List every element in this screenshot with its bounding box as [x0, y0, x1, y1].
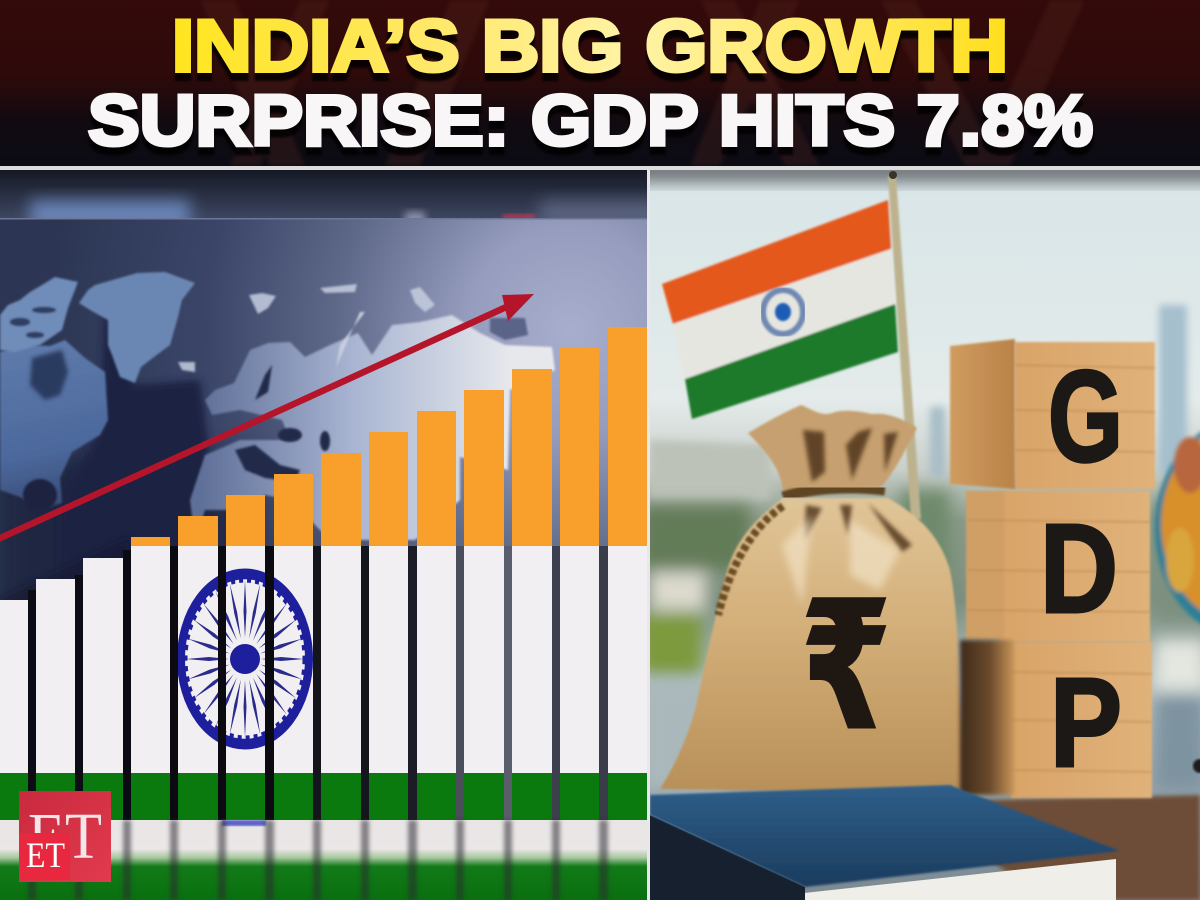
block G: G [1048, 343, 1123, 489]
bag rope [783, 488, 885, 497]
flag stripes [662, 200, 898, 419]
title line 2: SURPRISE: GDP HITS 7.8% [88, 90, 1093, 169]
flag pole [888, 176, 921, 519]
flag [662, 171, 921, 519]
panel divider [647, 170, 650, 900]
wooden GDP blocks [950, 339, 1155, 798]
continent: greenland [79, 272, 195, 383]
book [650, 785, 1120, 900]
bars: white section [0, 546, 647, 773]
money bag [660, 405, 980, 794]
ashoka chakra [181, 574, 309, 744]
panel: flag, rupee bag and GDP blocks [600, 160, 1200, 900]
title line 1: INDIA’S BIG GROWTH [172, 6, 1008, 87]
dark seas [235, 312, 528, 482]
bag highlights [782, 515, 900, 605]
panel: rising bar chart over world map [0, 170, 660, 900]
rupee symbol: ₹ [801, 564, 891, 769]
dark gaps between bars [0, 537, 608, 820]
bars: green section [0, 773, 647, 820]
continent: north america [0, 340, 108, 510]
blurred top band [0, 170, 647, 220]
ET logo: ET [28, 800, 102, 873]
continent: eurasia [190, 315, 555, 540]
table [983, 792, 1200, 900]
trend arrow [0, 294, 534, 540]
bag top fabric [748, 405, 917, 491]
header band [0, 0, 1200, 170]
block D [966, 491, 1150, 642]
block G [950, 339, 1155, 489]
block D: D [1040, 498, 1118, 639]
small islands [178, 284, 435, 372]
globe [1155, 420, 1200, 636]
dark gulf [23, 479, 57, 511]
hudson bay [30, 350, 68, 400]
flag chakra [763, 290, 803, 334]
bars: saffron section [131, 327, 647, 546]
bar chart in Indian flag colours [0, 320, 647, 820]
blurred city background [600, 160, 1200, 900]
bag folds [803, 428, 912, 552]
title line 1: INDIA’S BIG GROWTH [172, 14, 1008, 95]
blurred reflection of bars [0, 820, 647, 900]
dark ocean [78, 318, 212, 490]
arctic islands [0, 277, 78, 352]
title [88, 6, 1093, 169]
bag body [660, 498, 980, 794]
map background [0, 170, 647, 600]
title line 2: SURPRISE: GDP HITS 7.8% [88, 82, 1093, 161]
block P: P [1050, 652, 1122, 793]
block P [960, 640, 1152, 798]
ET logo: ET [26, 835, 65, 875]
